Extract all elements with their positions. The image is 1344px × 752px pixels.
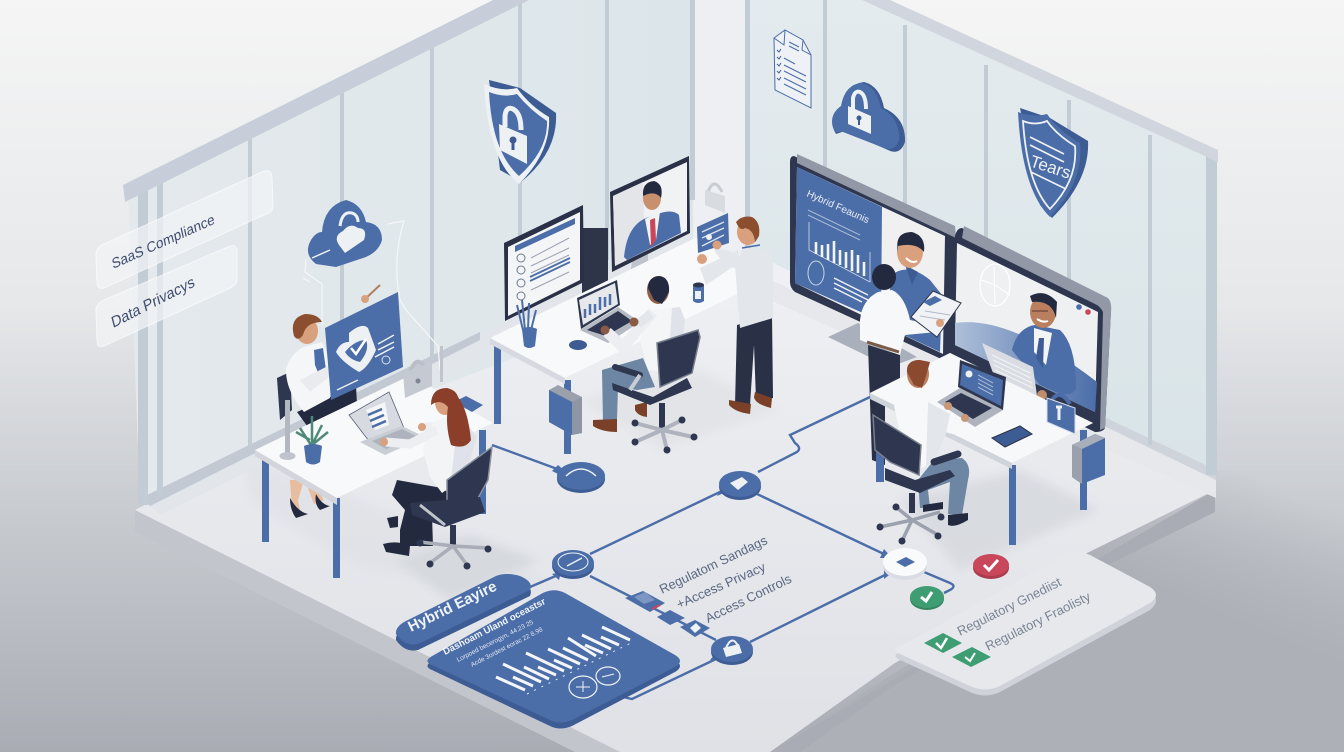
corner pillar — [690, 0, 750, 290]
checklist monitor — [504, 205, 608, 321]
desk 1 — [255, 375, 493, 578]
icon: compliance document — [774, 30, 811, 108]
PC tower at desk 3 — [1072, 434, 1105, 484]
on-screen man in suit — [982, 293, 1076, 403]
workflow connector lines — [492, 397, 954, 699]
connector lines: white — [303, 221, 440, 370]
big monitor: video call — [950, 226, 1111, 432]
floating label: Data Privacys — [96, 246, 237, 347]
PC tower under desk 2 — [549, 385, 582, 435]
regulatory checklist card: Regulatory Fraolisty — [983, 588, 1093, 654]
padlock and tablet on desk 3 — [992, 395, 1075, 447]
green check boxes — [924, 633, 991, 667]
pill label: Hybrid Eayire — [396, 574, 531, 651]
office floor — [135, 200, 1344, 752]
laptop on desk 2 — [577, 280, 640, 343]
monitor heading: Hybrid Feaunis — [805, 189, 871, 226]
desk 3 — [870, 353, 1093, 545]
floating label: SaaS Compliance: SaaS Compliance — [110, 211, 216, 272]
floor text list — [657, 532, 794, 626]
floor text list: Access Controls — [703, 571, 794, 626]
big monitor: hybrid results — [790, 154, 956, 367]
office chair — [612, 330, 700, 454]
glass wall: right — [747, 0, 1218, 498]
icon: shield labelled Tears: Tears — [1028, 152, 1073, 183]
seated man at desk 2 — [593, 276, 700, 454]
floor text list: +Access Privacy — [674, 559, 768, 612]
floating label: SaaS Compliance — [96, 171, 273, 288]
dashboard card: Dashoam Uland oceastsr — [441, 596, 548, 658]
holographic panel — [325, 292, 403, 400]
icon: cloud open padlock — [308, 200, 382, 267]
floating label: Data Privacys: Data Privacys — [110, 273, 197, 332]
dashboard card — [427, 590, 680, 728]
regulatory checklist card — [896, 552, 1156, 696]
monitor bar chart — [808, 210, 870, 282]
woman at holographic panel — [277, 285, 403, 518]
office chair — [410, 447, 492, 570]
icon: shield with padlock — [484, 80, 556, 184]
laptop on desk 1 — [349, 392, 425, 455]
glass wall: left — [123, 0, 693, 515]
dashboard card: Lorpoed becerogyn, 44.23 25 — [456, 619, 535, 664]
floor text list: Regulatom Sandags — [657, 532, 770, 597]
office chair — [873, 415, 958, 544]
regulatory checklist card: Regulatory Gnediist — [955, 574, 1064, 639]
pill label: Hybrid Eayire: Hybrid Eayire — [405, 578, 500, 636]
seated man at desk 3 — [873, 360, 970, 544]
laptop on desk 3 — [937, 360, 1006, 427]
standing man with document — [860, 264, 961, 465]
desk items: pen pot, mouse, mug — [517, 282, 704, 350]
standing man with tablet — [697, 184, 773, 414]
ghost padlock — [705, 184, 725, 213]
small workflow icons — [625, 591, 710, 637]
on-screen man in blue shirt — [885, 232, 942, 352]
video call monitor — [610, 156, 690, 290]
desk 2 — [490, 238, 773, 454]
seated woman with ponytail — [380, 388, 492, 570]
icon: cloud padlock — [832, 82, 905, 152]
icon: shield labelled Tears — [1018, 108, 1088, 218]
connector arrowheads — [552, 465, 893, 660]
pole, plant and grey padlock — [280, 346, 443, 464]
dashboard card: Acde 3ordest eorac 22 8.98 — [470, 626, 544, 669]
workflow nodes — [552, 462, 1009, 665]
dashboard bar chart — [496, 627, 630, 690]
